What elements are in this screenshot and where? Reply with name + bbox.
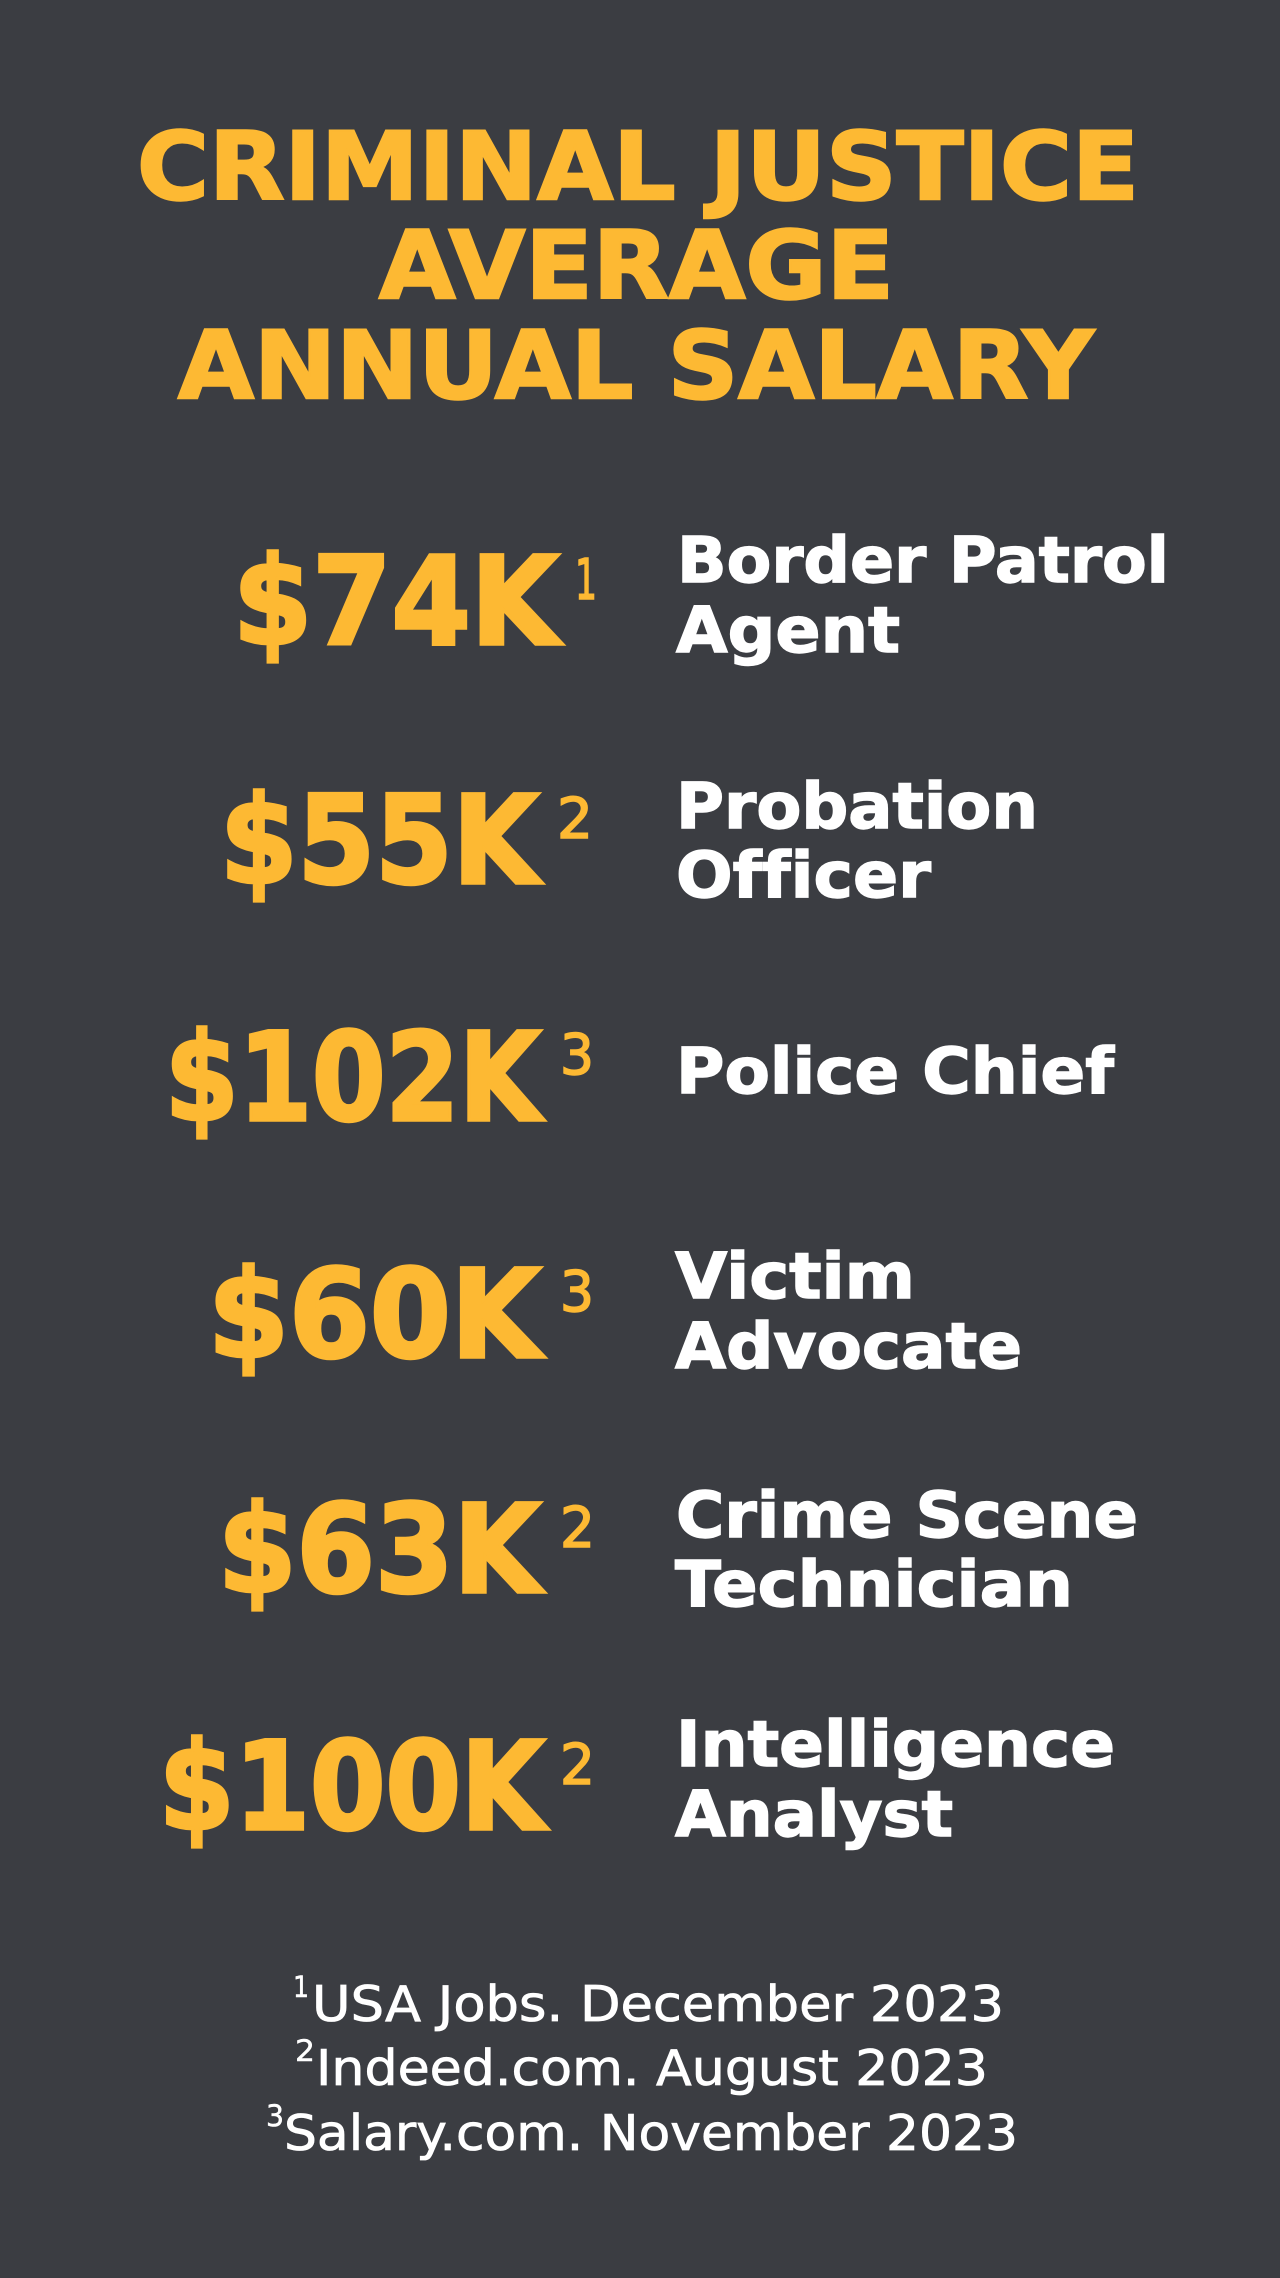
row: police chief salary: Police Chief (676, 1035, 1115, 1108)
row: probation officer salary: $55K (220, 770, 543, 912)
row: intelligence analyst salary (159, 1708, 1115, 1858)
title: ANNUAL SALARY (178, 312, 1095, 421)
footnotes: sources: Salary.com. November 2023 (284, 2105, 1018, 2162)
title (137, 113, 1139, 421)
row: border patrol agent salary: Border Patrol (677, 524, 1169, 597)
row: probation officer salary: 2 (557, 787, 593, 852)
footnotes: sources: USA Jobs. December 2023 (312, 1976, 1004, 2033)
footnotes: sources: Indeed.com. August 2023 (316, 2040, 988, 2097)
row: border patrol agent salary: Agent (676, 594, 900, 667)
row: victim advocate salary: Advocate (675, 1310, 1022, 1383)
row: intelligence analyst salary: $100K (159, 1716, 549, 1858)
row: victim advocate salary: $60K (208, 1244, 545, 1386)
footnotes: sources: 2 (295, 2034, 315, 2068)
row: victim advocate salary (208, 1240, 1022, 1386)
row: probation officer salary: Officer (676, 839, 931, 912)
row: intelligence analyst salary: Analyst (675, 1778, 953, 1851)
row: crime scene technician salary: Crime Scene (676, 1479, 1138, 1552)
row: intelligence analyst salary: 2 (560, 1733, 595, 1798)
footnotes: sources (266, 1970, 1018, 2162)
row: probation officer salary: Probation (676, 770, 1038, 843)
row: victim advocate salary: 3 (560, 1260, 594, 1325)
row: victim advocate salary: Victim (675, 1240, 915, 1313)
footnotes: sources: 1 (293, 1970, 309, 2004)
row: police chief salary: 3 (560, 1023, 594, 1088)
row: police chief salary: $102K (165, 1007, 545, 1149)
row: police chief salary (165, 1007, 1115, 1149)
row: crime scene technician salary: $63K (218, 1479, 545, 1621)
row: border patrol agent salary (233, 524, 1169, 673)
row: crime scene technician salary (218, 1479, 1138, 1621)
row: crime scene technician salary: 2 (560, 1496, 595, 1561)
row: probation officer salary (220, 770, 1038, 912)
row: border patrol agent salary: $74K (233, 531, 563, 673)
row: border patrol agent salary: 1 (575, 548, 597, 613)
row: crime scene technician salary: Technician (675, 1548, 1073, 1621)
title: CRIMINAL JUSTICE (137, 113, 1139, 222)
footnotes: sources: 3 (266, 2099, 284, 2133)
row: intelligence analyst salary: Intelligence (676, 1708, 1115, 1781)
title: AVERAGE (379, 212, 894, 321)
